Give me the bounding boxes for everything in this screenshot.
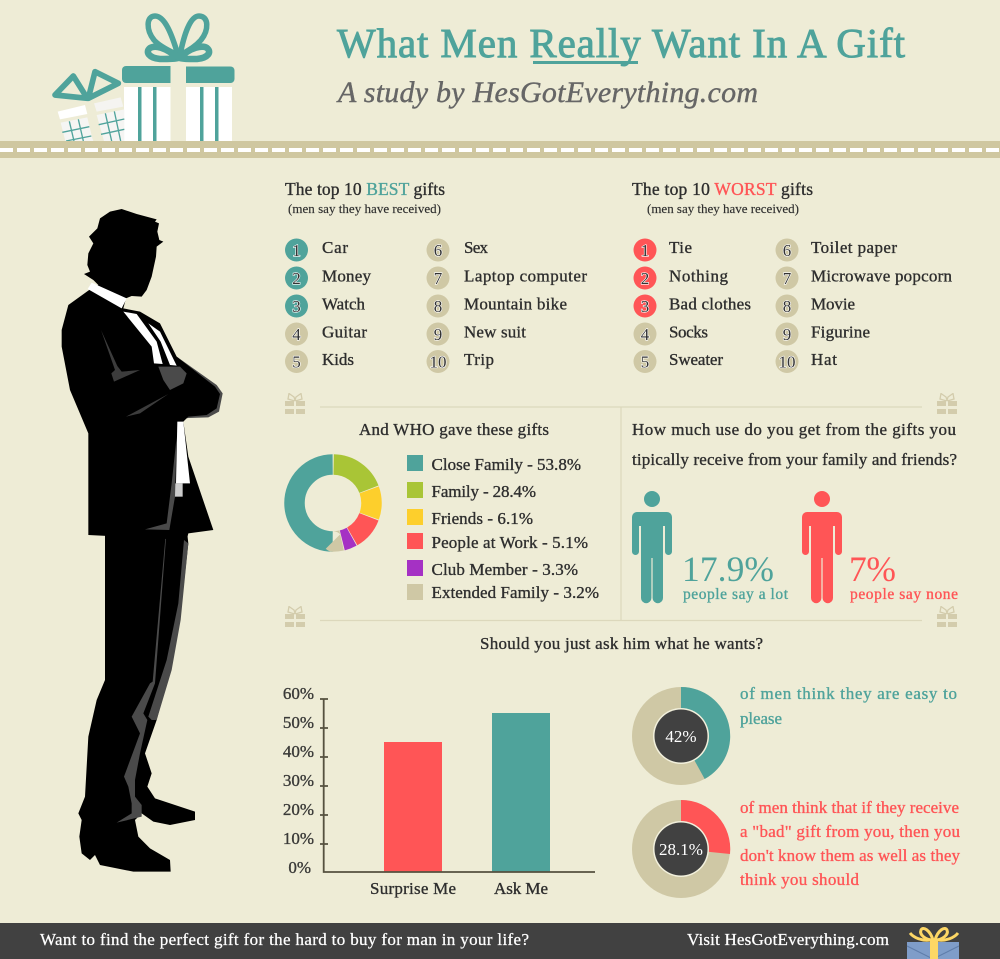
legend: who gave gifts: Extended Family - 3.2% (432, 583, 599, 602)
stat: 7 percent: people say none (850, 586, 958, 603)
heading: how much use: tipically receive from your family and friends? (632, 450, 957, 469)
icon: small gift bottom right (937, 606, 957, 627)
list: best gifts: 10 (430, 352, 446, 372)
text: bad gift: think you should (740, 870, 860, 889)
bar chart: surprise vs ask: 50% (283, 713, 314, 732)
list: worst gifts: 10 (778, 352, 796, 372)
stat: 17.9 percent (682, 549, 789, 603)
list: best gifts: Mountain bike (464, 294, 567, 314)
list: best gifts: Sex (464, 238, 488, 257)
icon: red person (802, 491, 842, 603)
bar chart: surprise vs ask: 10% (283, 829, 314, 848)
footer bar: Want to find the perfect gift for the hard to buy for man in your life? (40, 930, 529, 949)
icon: large gift box (122, 16, 234, 141)
list: best gifts: 4 (292, 325, 301, 344)
donut: 42 percent: 42% (665, 727, 697, 746)
list: best gifts: 7 (434, 269, 443, 288)
list: worst gifts: Movie (811, 294, 855, 314)
text: easy to please: please (740, 709, 782, 728)
icon: small tilted gift box (55, 72, 124, 141)
heading: top 10 worst gifts: The top 10 WORST gifts (632, 179, 813, 199)
list: best gifts: 9 (434, 325, 442, 344)
list: best gifts (285, 238, 587, 373)
bar chart: surprise vs ask: 40% (283, 742, 314, 761)
heading: should you ask: Should you just ask him what he wants? (480, 634, 763, 653)
stat: 7 percent (849, 549, 958, 603)
title: What Men Really Want In A Gift (337, 20, 906, 66)
list: worst gifts: 8 (783, 297, 791, 316)
bar chart: surprise vs ask: 30% (283, 771, 314, 790)
icon: small gift bottom left (285, 606, 305, 627)
list: best gifts: Guitar (322, 322, 367, 342)
donut: 42 percent (632, 687, 730, 785)
list: best gifts: Watch (322, 294, 366, 314)
list: worst gifts: Bad clothes (669, 294, 751, 314)
list: worst gifts: 1 (641, 241, 649, 260)
bar chart: surprise vs ask: 20% (283, 800, 314, 819)
icon: small gift top right (937, 394, 957, 414)
list: worst gifts: Figurine (811, 322, 870, 342)
text: easy to please (740, 684, 957, 728)
list: best gifts: 2 (292, 269, 301, 288)
silhouette: man with crossed arms (62, 209, 223, 872)
list: worst gifts: 4 (641, 325, 650, 344)
list: best gifts: Laptop computer (464, 266, 587, 286)
list: best gifts: 6 (434, 241, 442, 260)
heading: top 10 best gifts (285, 179, 445, 216)
donut chart: who gave gifts (294, 464, 372, 542)
text: bad gift: a "bad" gift from you, then you (740, 822, 960, 841)
list: worst gifts: 7 (783, 269, 792, 288)
list: best gifts: 3 (292, 297, 301, 316)
heading: top 10 best gifts: The top 10 BEST gifts (285, 179, 445, 199)
text: bad gift (740, 798, 960, 889)
legend: who gave gifts (407, 455, 599, 602)
list: best gifts: Money (322, 266, 372, 286)
list: worst gifts: Nothing (669, 266, 728, 286)
list: worst gifts: 2 (641, 269, 649, 288)
list: best gifts: 8 (434, 297, 442, 316)
legend: who gave gifts: People at Work - 5.1% (432, 533, 588, 552)
list: best gifts: Trip (464, 350, 494, 369)
donut: 28.1 percent: 28.1% (659, 840, 703, 859)
icon: teal person (632, 491, 672, 603)
list: worst gifts: 9 (783, 325, 791, 344)
bar chart: surprise vs ask: Surprise Me (370, 879, 456, 898)
icon: footer gift (907, 928, 959, 959)
subtitle: A study by HesGotEverything.com (336, 76, 758, 109)
list: worst gifts: Microwave popcorn (811, 266, 952, 286)
bar chart: surprise vs ask: 0% (288, 858, 311, 877)
list: worst gifts: Sweater (669, 350, 723, 369)
icon: small gift top left (285, 394, 305, 414)
legend: who gave gifts: Friends - 6.1% (432, 509, 533, 528)
footer bar: Visit HesGotEverything.com (687, 930, 889, 949)
heading: how much use (632, 420, 957, 469)
heading: who gave these gifts: And WHO gave these gifts (359, 420, 549, 439)
list: worst gifts: Tie (669, 238, 692, 257)
text: bad gift: don't know them as well as they (740, 846, 960, 865)
list: best gifts: 1 (292, 241, 301, 260)
text: bad gift: of men think that if they receive (740, 798, 959, 817)
stat: 7 percent: 7% (849, 549, 896, 589)
list: best gifts: 5 (292, 352, 301, 372)
heading: top 10 best gifts: (men say they have received) (288, 201, 441, 216)
list: best gifts: Car (322, 238, 348, 257)
footer bar (0, 923, 1000, 959)
donut: 28.1 percent (632, 800, 730, 898)
ribbon divider (0, 141, 1000, 158)
list: worst gifts: 5 (641, 352, 649, 372)
stat: 17.9 percent: 17.9% (682, 549, 774, 589)
legend: who gave gifts: Club Member - 3.3% (432, 560, 578, 579)
legend: who gave gifts: Close Family - 53.8% (432, 455, 581, 474)
list: worst gifts (634, 238, 952, 373)
bar chart: surprise vs ask (283, 684, 595, 898)
list: worst gifts: 6 (783, 241, 791, 260)
stat: 17.9 percent: people say a lot (683, 586, 789, 603)
heading: top 10 worst gifts (632, 179, 813, 216)
list: best gifts: New suit (464, 322, 526, 342)
list: worst gifts: Hat (811, 350, 837, 369)
list: best gifts: Kids (322, 350, 354, 369)
heading: how much use: How much use do you get from the gifts you (632, 420, 956, 439)
legend: who gave gifts: Family - 28.4% (432, 482, 536, 501)
list: worst gifts: Socks (669, 322, 708, 342)
text: easy to please: of men think they are easy to (740, 684, 957, 703)
bar chart: surprise vs ask: 60% (283, 684, 314, 703)
list: worst gifts: 3 (641, 297, 649, 316)
heading: top 10 worst gifts: (men say they have received) (647, 201, 799, 216)
bar chart: surprise vs ask: Ask Me (494, 879, 548, 898)
list: worst gifts: Toilet paper (811, 238, 897, 257)
